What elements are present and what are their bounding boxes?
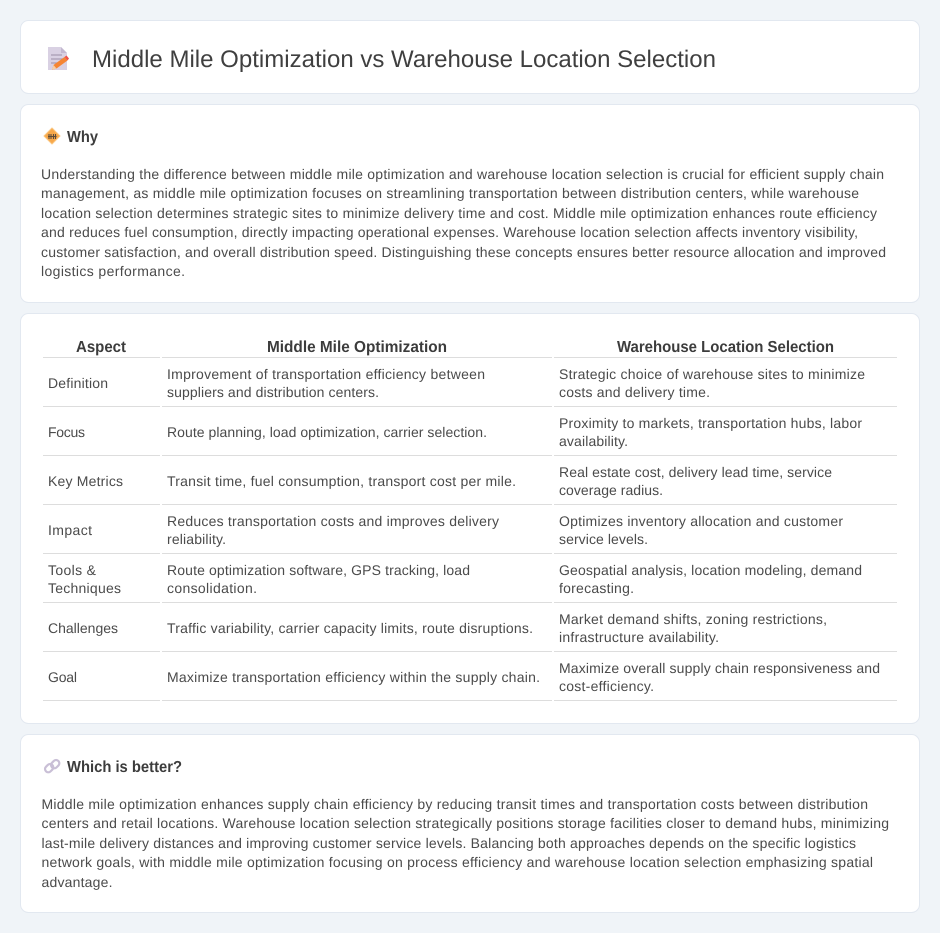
row: definition bbox=[43, 366, 897, 407]
row: challenges: Market demand shifts, zoning restrictions, bbox=[559, 611, 827, 627]
row: goal: Maximize overall supply chain responsiveness and bbox=[559, 660, 880, 676]
row: impact bbox=[43, 513, 897, 554]
row: definition: Improvement of transportation efficiency between bbox=[167, 366, 485, 382]
text block: which is better: network goals, with middle mile optimization focusing on process efficiency and warehouse location selection emphasizing spatial bbox=[42, 854, 873, 870]
row: goal: cost-efficiency. bbox=[559, 678, 654, 694]
text block: why: management, as middle mile optimization focuses on streamlining transportation between distribution centers, while warehouse bbox=[41, 185, 859, 201]
row: challenges bbox=[43, 611, 897, 652]
row: definition: suppliers and distribution centers. bbox=[167, 384, 379, 400]
row: goal bbox=[43, 660, 897, 701]
row: tools and techniques bbox=[43, 562, 897, 603]
icon: link bbox=[44, 759, 61, 774]
table header: Middle Mile Optimization bbox=[267, 339, 447, 356]
text block: why: location selection determines strategic sites to minimize delivery time and cost. Middle mile optimization enhances route efficiency bbox=[41, 205, 877, 221]
heading: why: Why bbox=[67, 129, 98, 146]
row: impact: Optimizes inventory allocation and customer bbox=[559, 513, 843, 529]
row: focus: Focus bbox=[48, 424, 85, 440]
row: definition: Strategic choice of warehouse sites to minimize bbox=[559, 366, 865, 382]
icon: document with pencil bbox=[48, 47, 69, 70]
row: focus: Proximity to markets, transportation hubs, labor bbox=[559, 415, 862, 431]
text block: why: logistics performance. bbox=[41, 263, 185, 279]
row: key metrics: Real estate cost, delivery lead time, service bbox=[559, 464, 832, 480]
row: challenges: infrastructure availability. bbox=[559, 629, 719, 645]
row: impact: Impact bbox=[48, 522, 92, 538]
row: goal: Goal bbox=[48, 669, 77, 685]
row: impact: Reduces transportation costs and improves delivery bbox=[167, 513, 499, 529]
text block: why bbox=[41, 166, 886, 279]
table header: Aspect bbox=[76, 339, 127, 356]
row: definition: costs and delivery time. bbox=[559, 384, 710, 400]
row: focus: Route planning, load optimization, carrier selection. bbox=[167, 424, 487, 440]
text block: which is better: last-mile delivery distances and improving customer service levels. Balancing both approaches depends on the specific logistics bbox=[42, 835, 856, 851]
panel: which is better bbox=[20, 734, 920, 912]
text block: why: Understanding the difference between middle mile optimization and warehouse location selection is crucial for efficient supply chain bbox=[41, 166, 884, 182]
text block: which is better: centers and retail locations. Warehouse location selection strategically positions storage facilities closer to demand hubs, minimizing bbox=[42, 815, 889, 831]
row: definition: Definition bbox=[48, 375, 108, 391]
text block: which is better: advantage. bbox=[42, 874, 112, 890]
row: key metrics: coverage radius. bbox=[559, 482, 663, 498]
row: tools and techniques: consolidation. bbox=[167, 580, 257, 596]
row: focus: availability. bbox=[559, 433, 628, 449]
row: challenges: Challenges bbox=[48, 620, 118, 636]
text block: which is better: Middle mile optimization enhances supply chain efficiency by reducing transit times and transportation costs between distribution bbox=[42, 796, 868, 812]
heading: which is better: Which is better? bbox=[67, 759, 182, 776]
row: key metrics: Key Metrics bbox=[48, 473, 123, 489]
table header bbox=[43, 339, 897, 358]
panel: header bbox=[20, 20, 920, 94]
row: focus bbox=[43, 415, 897, 456]
row: tools and techniques: Geospatial analysis, location modeling, demand bbox=[559, 562, 862, 578]
row: key metrics bbox=[43, 464, 897, 505]
text block: why: customer satisfaction, and overall distribution speed. Distinguishing these concepts ensures better resource allocation and improved bbox=[41, 244, 886, 260]
row: tools and techniques: Route optimization software, GPS tracking, load bbox=[167, 562, 470, 578]
row: goal: Maximize transportation efficiency within the supply chain. bbox=[167, 669, 540, 685]
row: tools and techniques: Techniques bbox=[48, 580, 121, 596]
row: key metrics: Transit time, fuel consumption, transport cost per mile. bbox=[167, 473, 516, 489]
row: tools and techniques: forecasting. bbox=[559, 580, 634, 596]
text block: why: and reduces fuel consumption, directly impacting operational expenses. Warehouse location selection affects inventory visibility, bbox=[41, 224, 858, 240]
panel: why bbox=[20, 104, 920, 302]
row: impact: service levels. bbox=[559, 531, 648, 547]
table header: Warehouse Location Selection bbox=[617, 339, 834, 356]
text block: which is better bbox=[42, 796, 889, 890]
panel: comparison table bbox=[20, 314, 920, 724]
row: challenges: Traffic variability, carrier capacity limits, route disruptions. bbox=[167, 620, 533, 636]
title: Middle Mile Optimization vs Warehouse Location Selection bbox=[92, 46, 716, 73]
row: impact: reliability. bbox=[167, 531, 226, 547]
icon: diamond sign bbox=[44, 128, 60, 144]
row: tools and techniques: Tools & bbox=[48, 562, 97, 578]
